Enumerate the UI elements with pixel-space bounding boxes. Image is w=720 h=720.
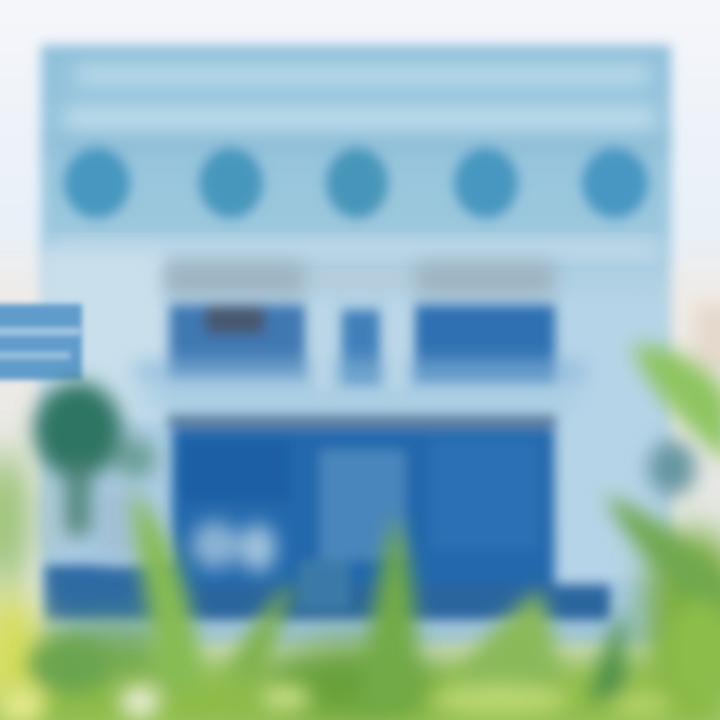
foreground foliage [0, 450, 720, 720]
row of round windows [64, 148, 648, 218]
top signage band [50, 66, 665, 146]
light cornice [50, 240, 660, 258]
shaded soffit [165, 262, 555, 296]
lower glazed entrance [45, 416, 610, 620]
balcony band [135, 362, 585, 410]
upper windows [170, 305, 555, 386]
distant warm building on right [695, 305, 720, 375]
foreground leaves [0, 345, 720, 720]
dark tree on left [34, 382, 696, 535]
pale columns [314, 300, 406, 390]
building facade [41, 45, 671, 645]
left neighbouring blue building [0, 304, 82, 380]
pale reflections [42, 490, 276, 572]
